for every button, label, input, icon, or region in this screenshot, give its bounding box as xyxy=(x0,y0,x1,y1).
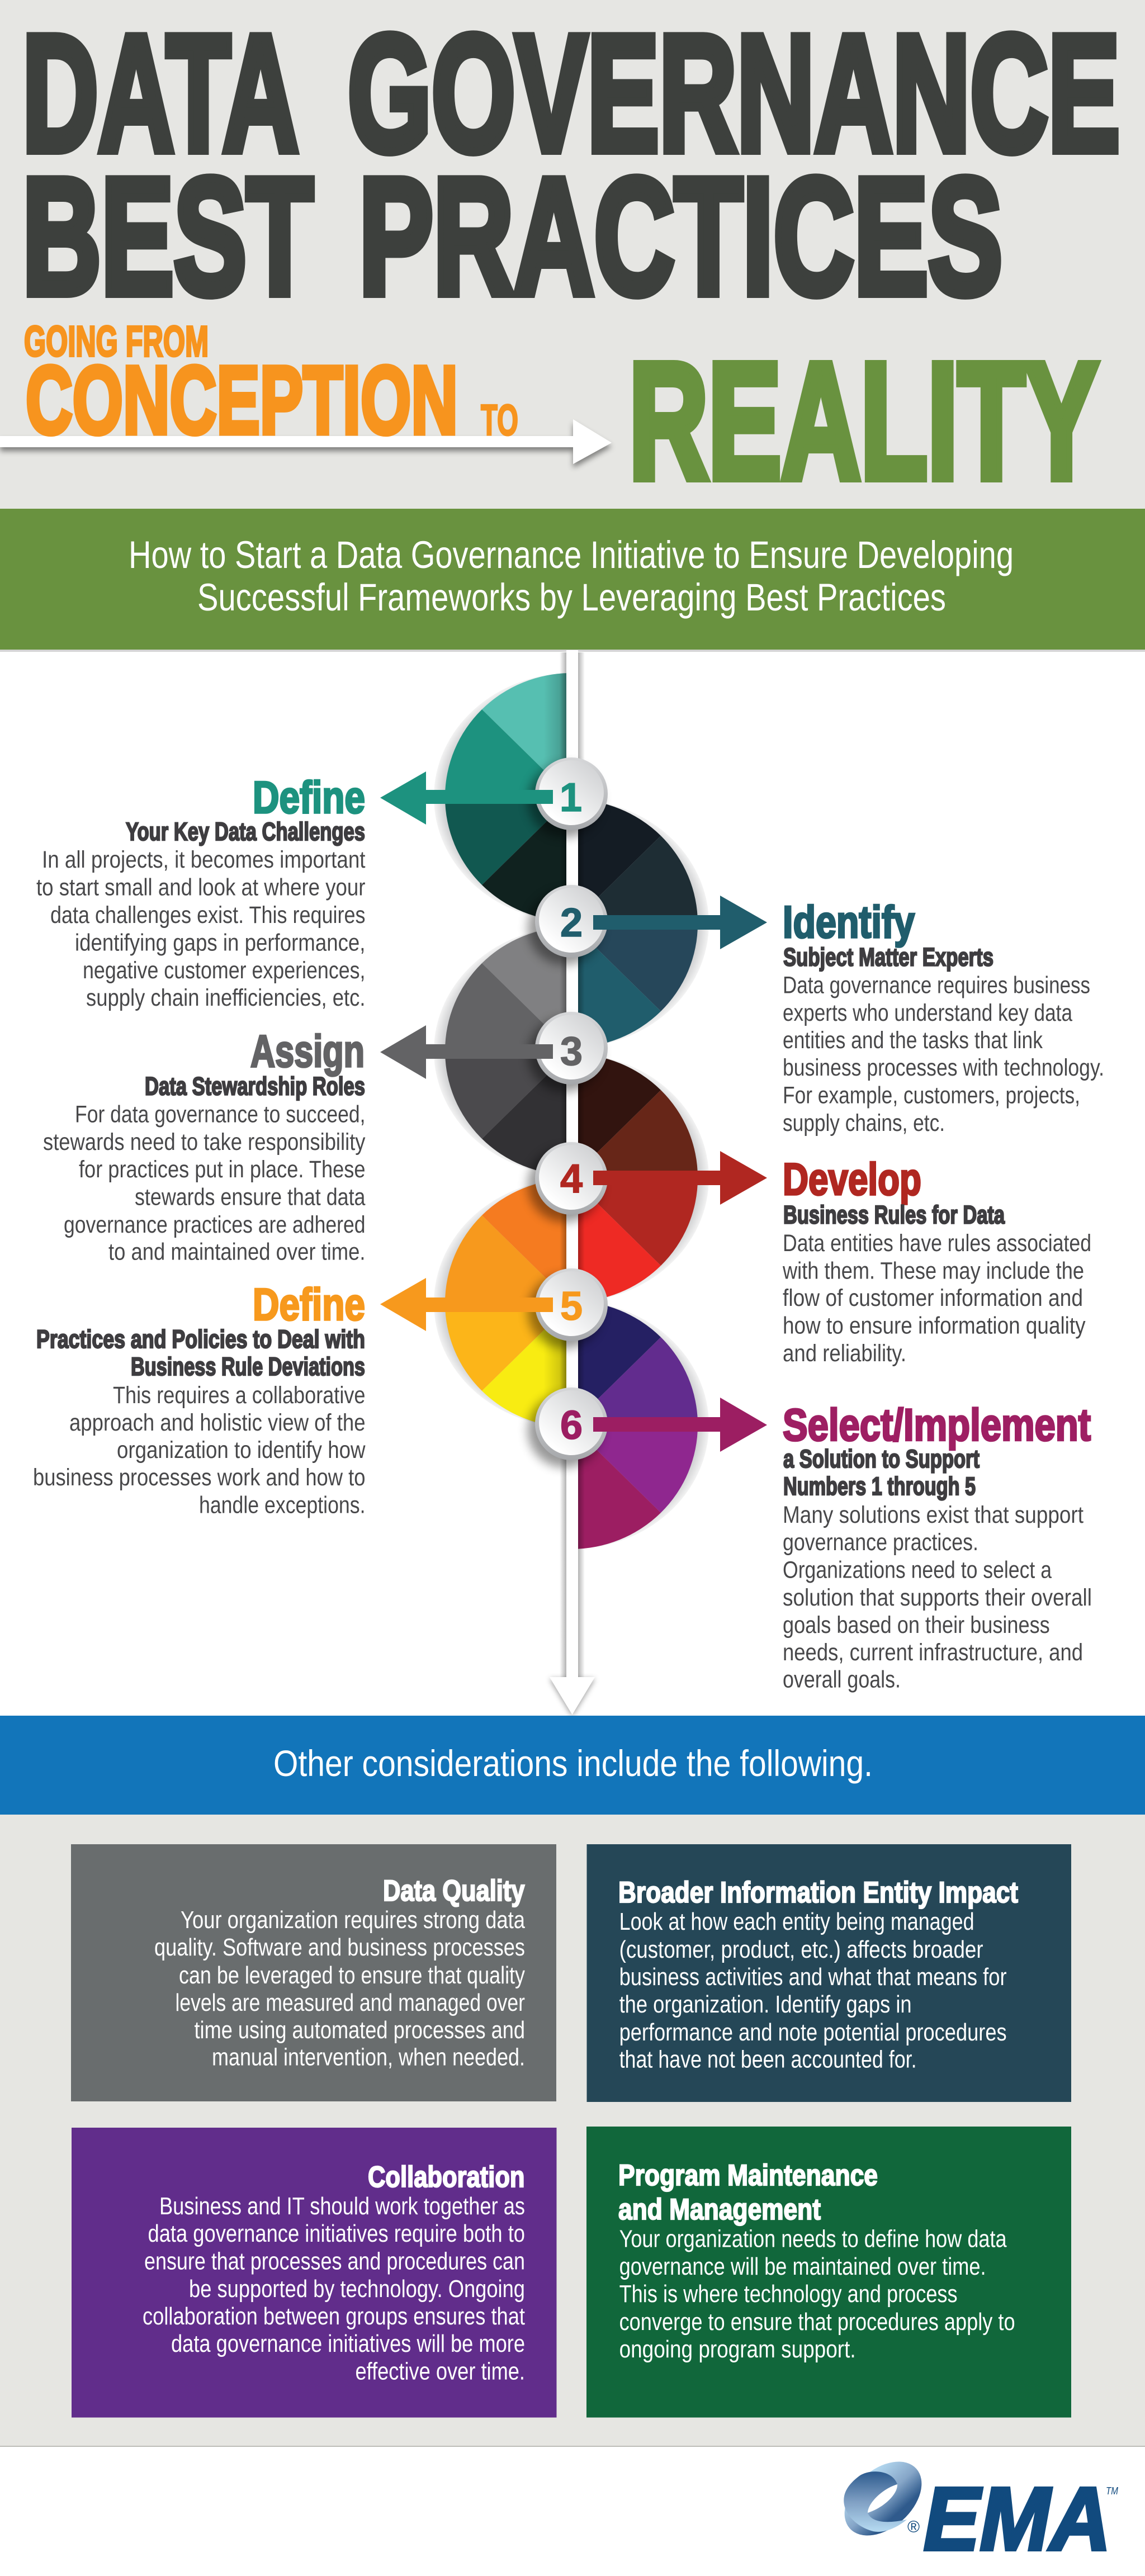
panel: broader information entity impact: performance and note potential procedures xyxy=(619,2019,1007,2046)
panel: collaboration: data governance initiatives will be more xyxy=(171,2330,525,2357)
step 5 text: Define: approach and holistic view of the xyxy=(69,1409,366,1436)
panel: collaboration xyxy=(72,2128,557,2417)
step 3 text: Assign: stewards need to take responsibility xyxy=(43,1129,366,1156)
badge 3: 3 xyxy=(560,1029,583,1074)
step 3 text: Assign: Data Stewardship Roles xyxy=(145,1072,365,1100)
step 1 text: Define: data challenges exist. This requires xyxy=(50,902,366,929)
badge 4 xyxy=(528,1142,608,1222)
panel: broader information entity impact: the organization. Identify gaps in xyxy=(619,1991,912,2018)
banner: green intro: Successful Frameworks by Leveraging Best Practices xyxy=(197,576,946,619)
step 4 text: Develop: how to ensure information quality xyxy=(783,1313,1086,1339)
panel: data quality: quality. Software and business processes xyxy=(154,1934,525,1961)
title: DATA xyxy=(22,1,299,186)
step 6 text: Select/Implement: Numbers 1 through 5 xyxy=(783,1472,976,1500)
semicircle 4 xyxy=(578,1058,709,1298)
badge 6 xyxy=(528,1388,608,1467)
icon: EMA ring xyxy=(830,2447,936,2550)
badge 4: 4 xyxy=(560,1157,583,1201)
step 1 text: Define: to start small and look at where your xyxy=(36,874,366,901)
panel: data quality xyxy=(71,1844,556,2101)
semicircle 6 xyxy=(578,1305,709,1549)
title: BEST xyxy=(22,144,313,329)
step 4 text: Develop: Business Rules for Data xyxy=(783,1201,1005,1229)
step 1 text: Define: Define xyxy=(253,773,365,823)
arrow 5 xyxy=(380,1278,553,1331)
logo wordmark: EMA xyxy=(924,2469,1111,2569)
logo: EMA xyxy=(830,2447,1118,2569)
step 5 text: Define: handle exceptions. xyxy=(199,1491,366,1518)
step 6 text: Select/Implement: overall goals. xyxy=(783,1666,901,1693)
badge 2 xyxy=(528,885,608,965)
step 3 text: Assign: for practices put in place. These xyxy=(79,1156,366,1183)
panel: data quality: levels are measured and managed over xyxy=(176,1989,525,2016)
step 1 text: Define: negative customer experiences, xyxy=(83,957,366,984)
panel: collaboration: collaboration between groups ensures that xyxy=(143,2303,525,2330)
panel: data quality: time using automated processes and xyxy=(195,2016,525,2044)
title xyxy=(22,1,1120,329)
arrow 3 xyxy=(380,1025,553,1079)
step 2 text: Identify xyxy=(783,897,1104,1137)
step 6 text: Select/Implement xyxy=(783,1400,1092,1693)
panel: program maintenance and management: Program Maintenance xyxy=(618,2159,878,2192)
panel: collaboration: Collaboration xyxy=(368,2161,524,2194)
semicircle 1 xyxy=(434,673,566,917)
badge 6: 6 xyxy=(560,1403,583,1448)
badge 2: 2 xyxy=(560,901,583,945)
panel: collaboration: be supported by technology. Ongoing xyxy=(189,2275,525,2303)
step 4 text: Develop: with them. These may include the xyxy=(782,1258,1084,1285)
chart: stacked semicircle timeline xyxy=(380,650,767,1715)
panel: program maintenance and management: Your organization needs to define how data xyxy=(619,2225,1007,2253)
step 6 text: Select/Implement: solution that supports their overall xyxy=(783,1584,1092,1611)
subtitle: going from conception to: CONCEPTION xyxy=(26,347,458,454)
step 2 text: Identify: Identify xyxy=(783,897,915,948)
top background panel xyxy=(0,0,1145,509)
registered mark: ® xyxy=(907,2518,920,2536)
step 6 text: Select/Implement: a Solution to Support xyxy=(783,1445,980,1473)
step 6 text: Select/Implement: Select/Implement xyxy=(783,1400,1091,1450)
arrow 1 xyxy=(380,771,553,825)
step 5 text: Define: This requires a collaborative xyxy=(113,1382,366,1409)
step 2 text: Identify: supply chains, etc. xyxy=(783,1110,945,1137)
panel: program maintenance and management: ongoing program support. xyxy=(619,2336,856,2363)
arrow: conception to reality xyxy=(0,419,612,464)
vertical arrow xyxy=(550,650,595,1715)
step 6 text: Select/Implement: governance practices. xyxy=(783,1529,978,1556)
semicircle 2 xyxy=(578,804,709,1043)
banner: other considerations: Other considerations include the following. xyxy=(273,1742,873,1784)
badge 1 xyxy=(528,757,608,837)
arrow 2 xyxy=(593,896,767,949)
panel: collaboration: ensure that processes and procedures can xyxy=(144,2248,525,2275)
panel: collaboration: Business and IT should work together as xyxy=(159,2193,525,2220)
subtitle: going from conception to xyxy=(24,318,518,454)
step 3 text: Assign: For data governance to succeed, xyxy=(75,1101,366,1128)
arrow 4 xyxy=(593,1151,767,1205)
panel: collaboration: effective over time. xyxy=(356,2358,525,2385)
step 3 text: Assign: stewards ensure that data xyxy=(135,1184,366,1211)
panel: program maintenance and management: governance will be maintained over time. xyxy=(619,2253,986,2280)
step 5 text: Define xyxy=(33,1280,366,1518)
step 5 text: Define: Practices and Policies to Deal with xyxy=(36,1325,365,1353)
panel: data quality: can be leveraged to ensure that quality xyxy=(179,1962,525,1989)
footer divider xyxy=(0,2446,1145,2447)
subtitle: going from conception to: GOING FROM xyxy=(24,318,209,366)
step 6 text: Select/Implement: needs, current infrastructure, and xyxy=(783,1639,1083,1666)
panel: program maintenance and management: This is where technology and process xyxy=(619,2280,958,2308)
semicircle 5 xyxy=(434,1184,566,1423)
step 1 text: Define xyxy=(36,773,366,1011)
panel: program maintenance and management: converge to ensure that procedures apply to xyxy=(619,2308,1015,2336)
trademark: TM xyxy=(1106,2485,1118,2497)
arrow 6 xyxy=(593,1398,767,1452)
banner: other considerations xyxy=(0,1716,1145,1815)
step 1 text: Define: Your Key Data Challenges xyxy=(126,817,365,846)
panel: broader information entity impact: business activities and what that means for xyxy=(619,1963,1007,1991)
badge 1: 1 xyxy=(560,775,582,820)
banner: green intro xyxy=(0,509,1145,652)
step 5 text: Define: business processes work and how to xyxy=(33,1464,366,1491)
badge 5 xyxy=(528,1268,608,1348)
step 2 text: Identify: Subject Matter Experts xyxy=(783,943,993,972)
panel: data quality: manual intervention, when needed. xyxy=(212,2044,525,2071)
step 5 text: Define: Business Rule Deviations xyxy=(131,1352,365,1381)
panel: program maintenance and management: and Management xyxy=(618,2193,821,2226)
step 3 text: Assign: governance practices are adhered xyxy=(64,1211,366,1238)
step 4 text: Develop xyxy=(782,1154,1091,1367)
step 2 text: Identify: experts who understand key data xyxy=(783,1000,1072,1026)
step 6 text: Select/Implement: goals based on their business xyxy=(783,1612,1050,1639)
badge 5: 5 xyxy=(560,1284,583,1329)
panel: broader information entity impact: (customer, product, etc.) affects broader xyxy=(619,1936,983,1963)
panel: broader information entity impact xyxy=(587,1844,1071,2102)
step 5 text: Define: organization to identify how xyxy=(117,1437,366,1464)
step 1 text: Define: In all projects, it becomes important xyxy=(42,846,366,873)
semicircle 3 xyxy=(434,931,566,1171)
step 2 text: Identify: For example, customers, projects, xyxy=(783,1082,1080,1109)
subtitle: going from conception to: TO xyxy=(481,395,518,444)
panel: collaboration: data governance initiatives require both to xyxy=(148,2220,525,2247)
step 4 text: Develop: Develop xyxy=(783,1154,921,1205)
panel: broader information entity impact: Broader Information Entity Impact xyxy=(618,1876,1018,1909)
step 4 text: Develop: and reliability. xyxy=(783,1340,906,1367)
step 1 text: Define: supply chain inefficiencies, etc. xyxy=(86,984,366,1011)
panel: data quality: Data Quality xyxy=(383,1874,525,1907)
step 5 text: Define: Define xyxy=(253,1280,365,1330)
step 3 text: Assign: Assign xyxy=(250,1026,365,1077)
step 6 text: Select/Implement: Organizations need to select a xyxy=(783,1556,1052,1583)
step 6 text: Select/Implement: Many solutions exist that support xyxy=(783,1502,1084,1528)
step 4 text: Develop: Data entities have rules associated xyxy=(783,1230,1091,1257)
step 2 text: Identify: entities and the tasks that link xyxy=(783,1027,1043,1054)
badge 3 xyxy=(528,1012,608,1092)
panel: broader information entity impact: Look at how each entity being managed xyxy=(619,1908,974,1935)
lower background panel xyxy=(0,1815,1145,2446)
step 1 text: Define: identifying gaps in performance, xyxy=(75,929,366,956)
step 4 text: Develop: flow of customer information and xyxy=(783,1285,1083,1311)
panel: broader information entity impact: that have not been accounted for. xyxy=(619,2046,917,2073)
step 3 text: Assign: to and maintained over time. xyxy=(108,1239,366,1266)
panel: program maintenance and management xyxy=(586,2127,1071,2417)
panel: data quality: Your organization requires strong data xyxy=(181,1906,525,1934)
step 3 text: Assign xyxy=(43,1026,366,1266)
